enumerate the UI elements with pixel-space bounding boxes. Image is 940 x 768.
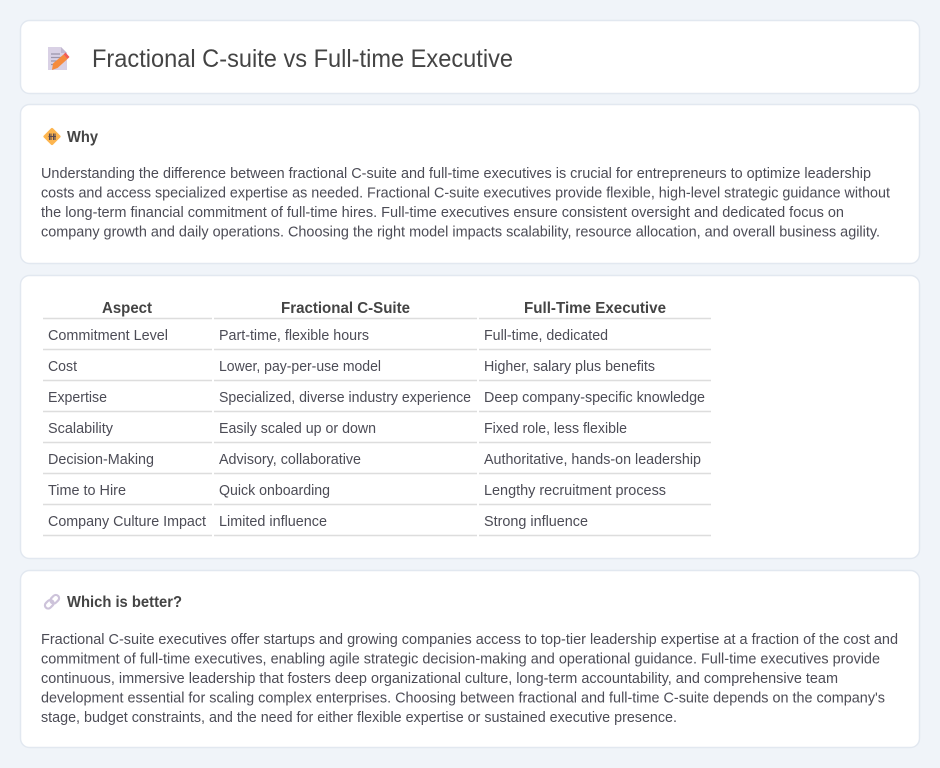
table header row: Full-Time Executive [524, 300, 666, 317]
table row: scalability: Easily scaled up or down [219, 421, 376, 437]
table row: scalability: Scalability [48, 421, 114, 437]
panel: comparison table [20, 276, 920, 558]
table row: expertise [48, 390, 705, 406]
text block: which is better paragraph: Fractional C-suite executives offer startups and growing companies access to top-tier leadership expertise at a fraction of the cost and [41, 632, 898, 648]
table row: company culture impact [48, 514, 588, 530]
text block: why paragraph: Understanding the difference between fractional C-suite and full-time executives is crucial for entrepreneurs to optimize leadership [41, 166, 871, 182]
table row: decision-making: Authoritative, hands-on leadership [484, 452, 701, 468]
text block: why paragraph: the long-term financial commitment of full-time hires. Full-time executives ensure consistent oversight and dedicated focus on [41, 205, 844, 221]
text block: why paragraph: company growth and daily operations. Choosing the right model impacts scalability, resource allocation, and overall business agility. [41, 224, 880, 240]
table row: commitment level [48, 328, 608, 344]
panel: title card [20, 20, 920, 94]
table row: time to hire: Quick onboarding [219, 483, 330, 499]
text block: which is better paragraph: development essential for scaling complex enterprises. Choosing between fractional and full-time C-suite depends on the company's [41, 690, 885, 706]
table row: company culture impact: Limited influence [219, 514, 327, 530]
table row: cost: Higher, salary plus benefits [484, 359, 655, 375]
table header row: Aspect [102, 300, 153, 317]
panel: which is better [20, 570, 920, 748]
table row: expertise: Specialized, diverse industry experience [219, 390, 471, 406]
table row: decision-making: Advisory, collaborative [219, 452, 361, 468]
heading: why: Why [67, 129, 98, 146]
icon: document with pencil [48, 47, 70, 70]
text block: which is better paragraph [41, 632, 898, 726]
table row: scalability [48, 421, 627, 437]
table row: cost [48, 359, 655, 375]
table row: cost: Cost [48, 359, 77, 375]
text block: why paragraph [41, 166, 890, 240]
table row: decision-making [48, 452, 701, 468]
text block: which is better paragraph: stage, budget constraints, and the need for either flexible expertise or sustained executive presence. [41, 710, 677, 726]
table row: commitment level: Part-time, flexible hours [219, 328, 369, 344]
table row: commitment level: Commitment Level [48, 328, 168, 344]
table row: time to hire: Time to Hire [48, 483, 126, 499]
text block: why paragraph: costs and access specialized expertise as needed. Fractional C-suite executives provide flexible, high-level strategic guidance without [41, 186, 890, 202]
table row: time to hire: Lengthy recruitment process [484, 483, 666, 499]
table row: expertise: Deep company-specific knowledge [484, 390, 705, 406]
table header row [102, 300, 666, 317]
table row: commitment level: Full-time, dedicated [484, 328, 608, 344]
table row: company culture impact: Company Culture Impact [48, 514, 206, 530]
title: Fractional C-suite vs Full-time Executive [92, 45, 513, 73]
panel: why [20, 104, 920, 264]
table row: decision-making: Decision-Making [48, 452, 154, 468]
icon: warning diamond [43, 127, 61, 146]
table row: company culture impact: Strong influence [484, 514, 588, 530]
heading: which is better: Which is better? [67, 594, 182, 611]
table row: cost: Lower, pay-per-use model [219, 359, 381, 375]
table header row: Fractional C-Suite [281, 300, 410, 317]
table row: time to hire [48, 483, 666, 499]
text block: which is better paragraph: commitment of full-time executives, enabling agile strategic decision-making and operational guidance. Full-time executives provide [41, 652, 880, 668]
table row: scalability: Fixed role, less flexible [484, 421, 627, 437]
text block: which is better paragraph: continuous, immersive leadership that fosters deep organizational culture, long-term accountability, and comprehensive team [41, 671, 838, 687]
table row: expertise: Expertise [48, 390, 107, 406]
icon: chain link [44, 594, 60, 610]
